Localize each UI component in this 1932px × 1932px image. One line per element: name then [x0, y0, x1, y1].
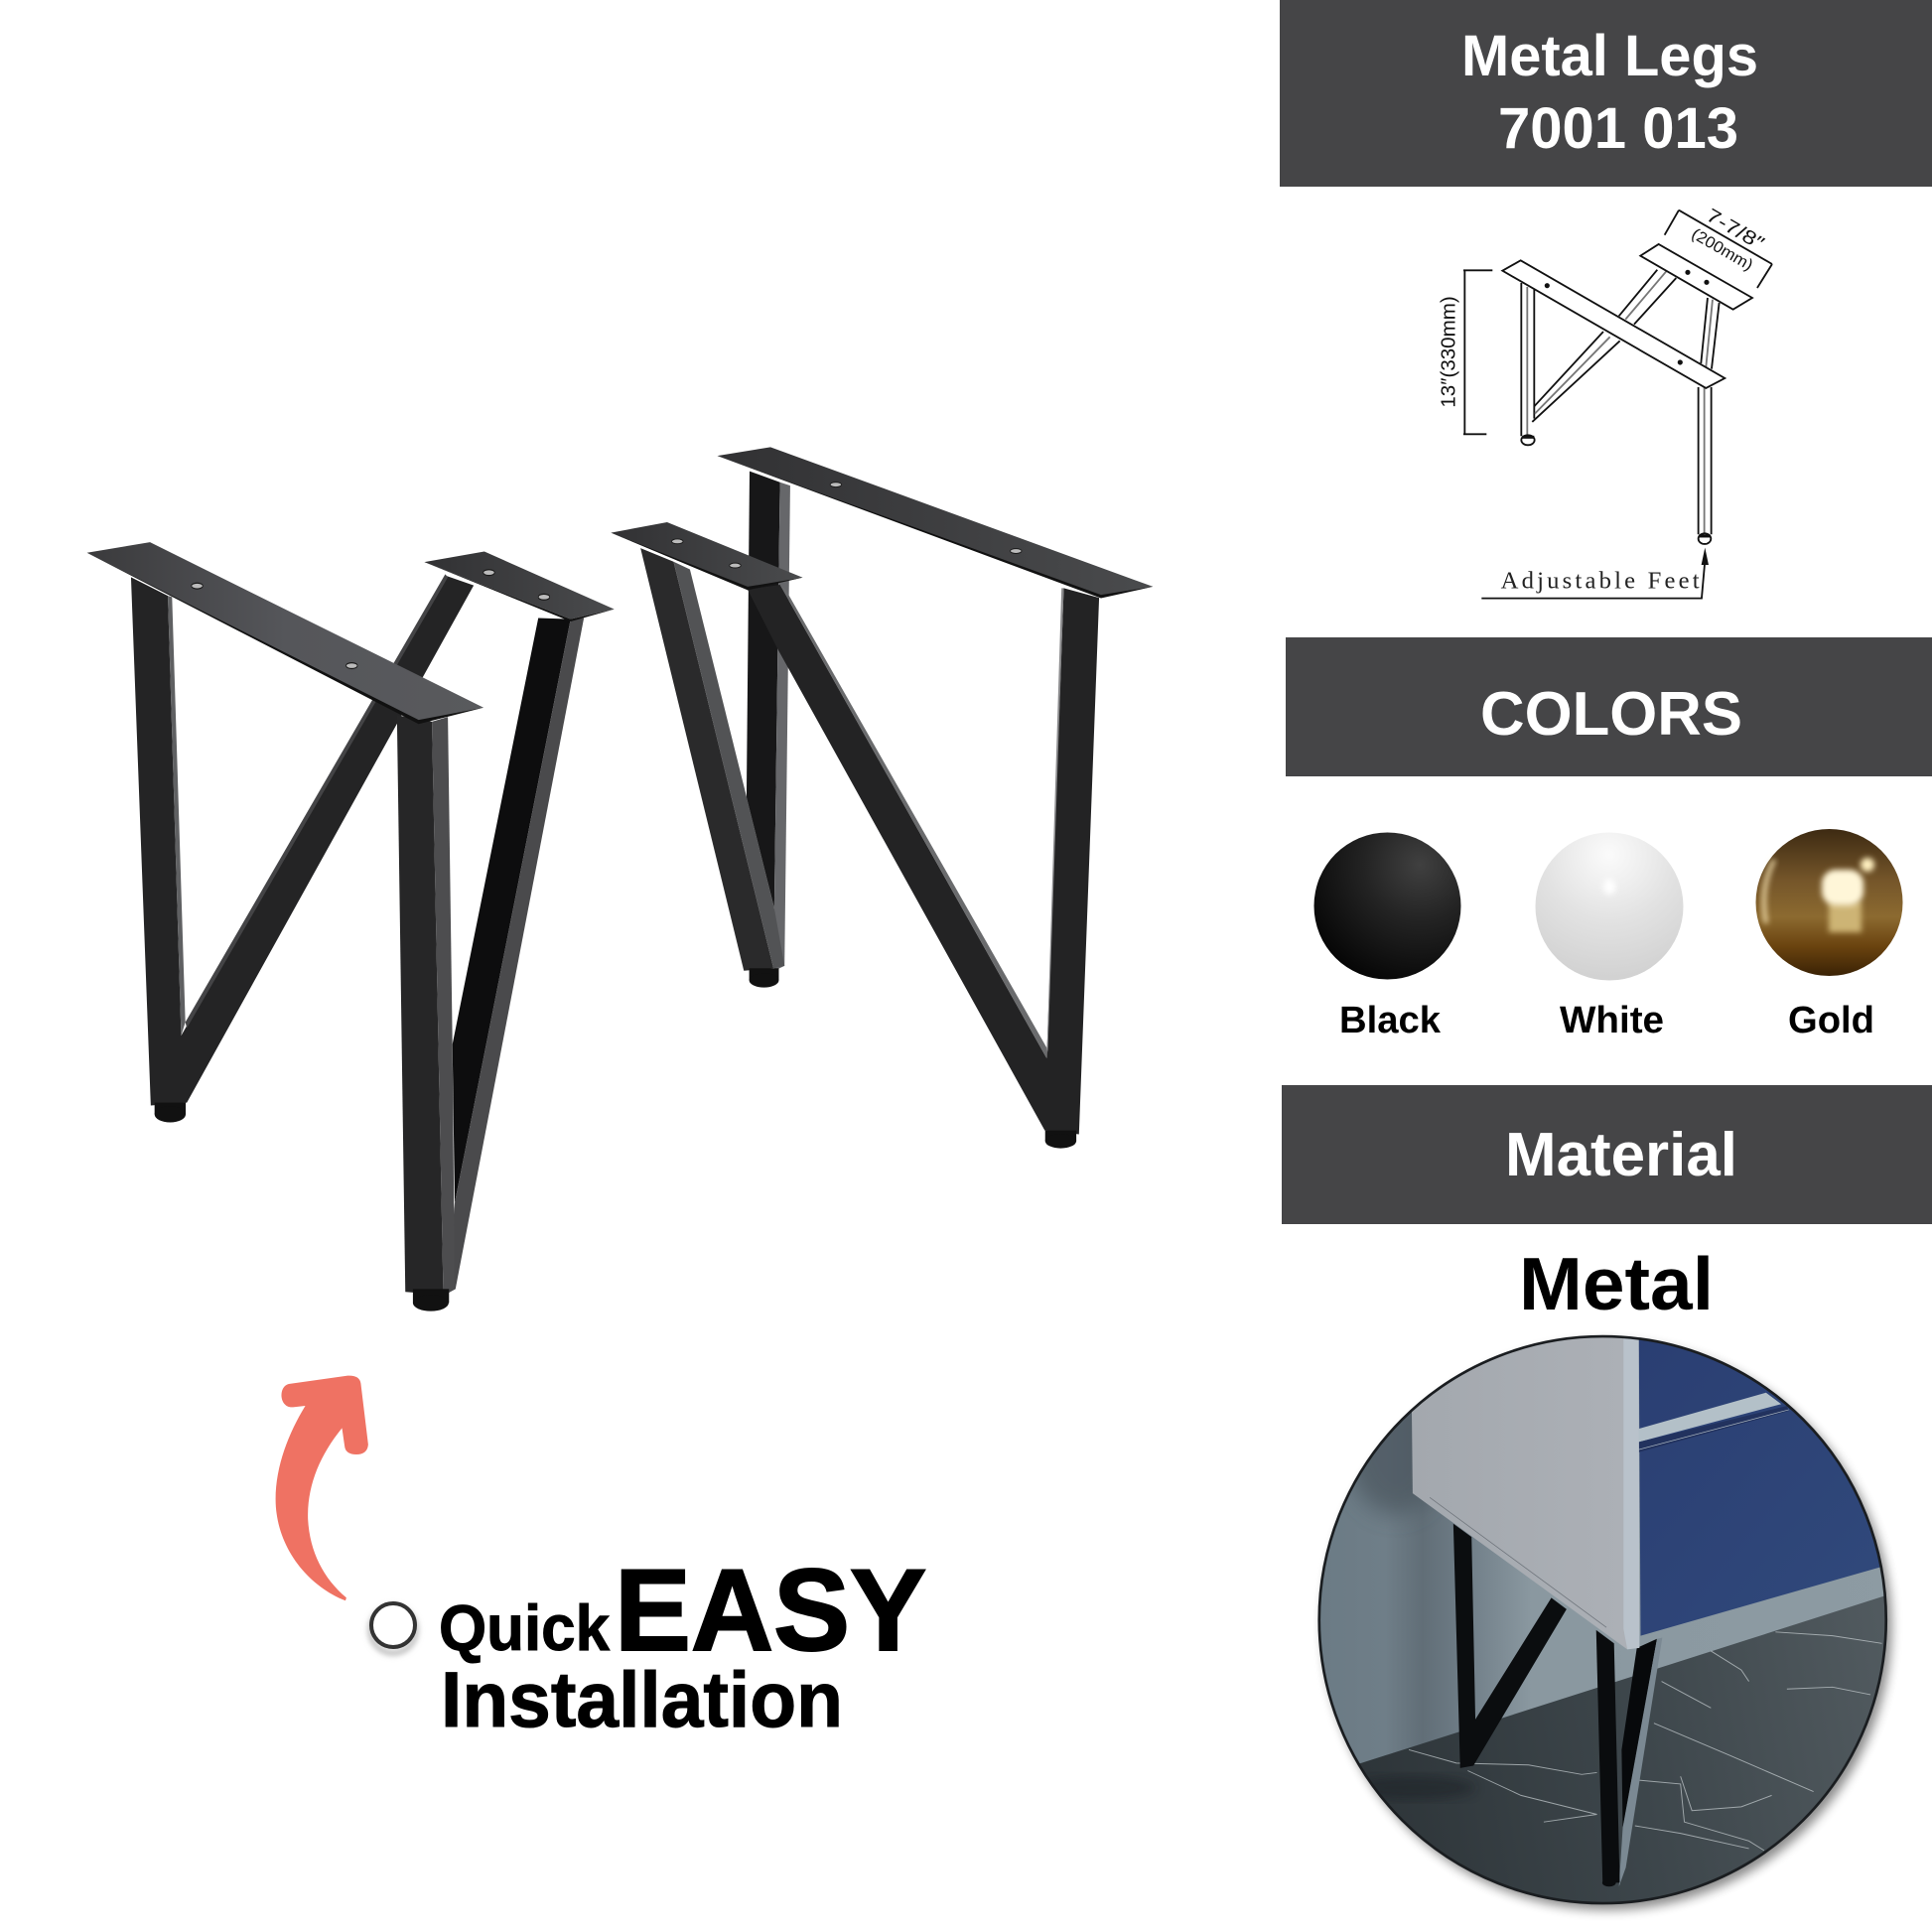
panel: product title header: 7001 013: [1498, 96, 1738, 161]
photo: circular cabinet close-up: [1301, 1320, 1908, 1928]
text: metal label: Metal: [1519, 1242, 1714, 1325]
panel: right pair of metal legs: [611, 447, 1153, 1149]
left leg post and strut: [1521, 270, 1676, 445]
adjustable feet callout: [1481, 548, 1709, 599]
rear leg post: [1701, 298, 1720, 369]
arrow: curved coral arrow: [276, 1376, 368, 1600]
slanted front leg: [640, 548, 784, 988]
swatch: gold: [1755, 829, 1902, 1041]
panel: material header: Material: [1505, 1121, 1737, 1189]
long top plate: [87, 542, 483, 724]
heading: quick easy installation: [439, 1545, 926, 1743]
panel: product title header: Metal Legs: [1461, 24, 1758, 88]
lens outline: [1319, 1336, 1886, 1903]
width dimension: 7-7/8″: [1703, 206, 1767, 255]
swatch: black: [1314, 832, 1461, 1041]
panel: left pair of metal legs: [87, 542, 615, 1311]
icon: round bullet ring: [370, 1603, 416, 1653]
lens shadow: [1323, 1341, 1891, 1910]
swatch: white: [1535, 832, 1684, 1041]
front leg post: [397, 715, 455, 1311]
leg frame with diagonal strut: [131, 574, 474, 1123]
heading: quick easy installation: Quick: [439, 1591, 611, 1664]
diagonal and outer leg: [748, 585, 1099, 1149]
panel: material header: [1282, 1085, 1932, 1224]
swatch: black: Black: [1339, 1000, 1442, 1041]
long plate: [1502, 260, 1725, 388]
swatch: white: White: [1560, 1000, 1664, 1041]
width dimension: [1665, 206, 1772, 288]
heading: quick easy installation: Installation: [441, 1655, 843, 1743]
cabinet scene: [1320, 1337, 1884, 1902]
far strut of the front leg: [447, 618, 584, 1294]
panel: colors header: COLORS: [1480, 680, 1742, 749]
front leg post: [1699, 387, 1712, 544]
short top plate: [424, 552, 615, 621]
width dimension: (200mm): [1689, 225, 1755, 274]
long top plate: [717, 447, 1153, 599]
swatch: gold: Gold: [1788, 1000, 1874, 1041]
diagram: dimension line drawing: [1437, 206, 1772, 599]
short plate: [1640, 244, 1752, 310]
heading: quick easy installation: EASY: [615, 1545, 926, 1675]
panel: product title header: [1280, 0, 1932, 187]
short top plate: [611, 522, 803, 590]
height dimension: 13″(330mm): [1437, 296, 1459, 408]
panel: colors header: [1286, 637, 1932, 776]
adjustable feet callout: Adjustable Feet: [1501, 568, 1700, 595]
rear post: [747, 472, 790, 971]
